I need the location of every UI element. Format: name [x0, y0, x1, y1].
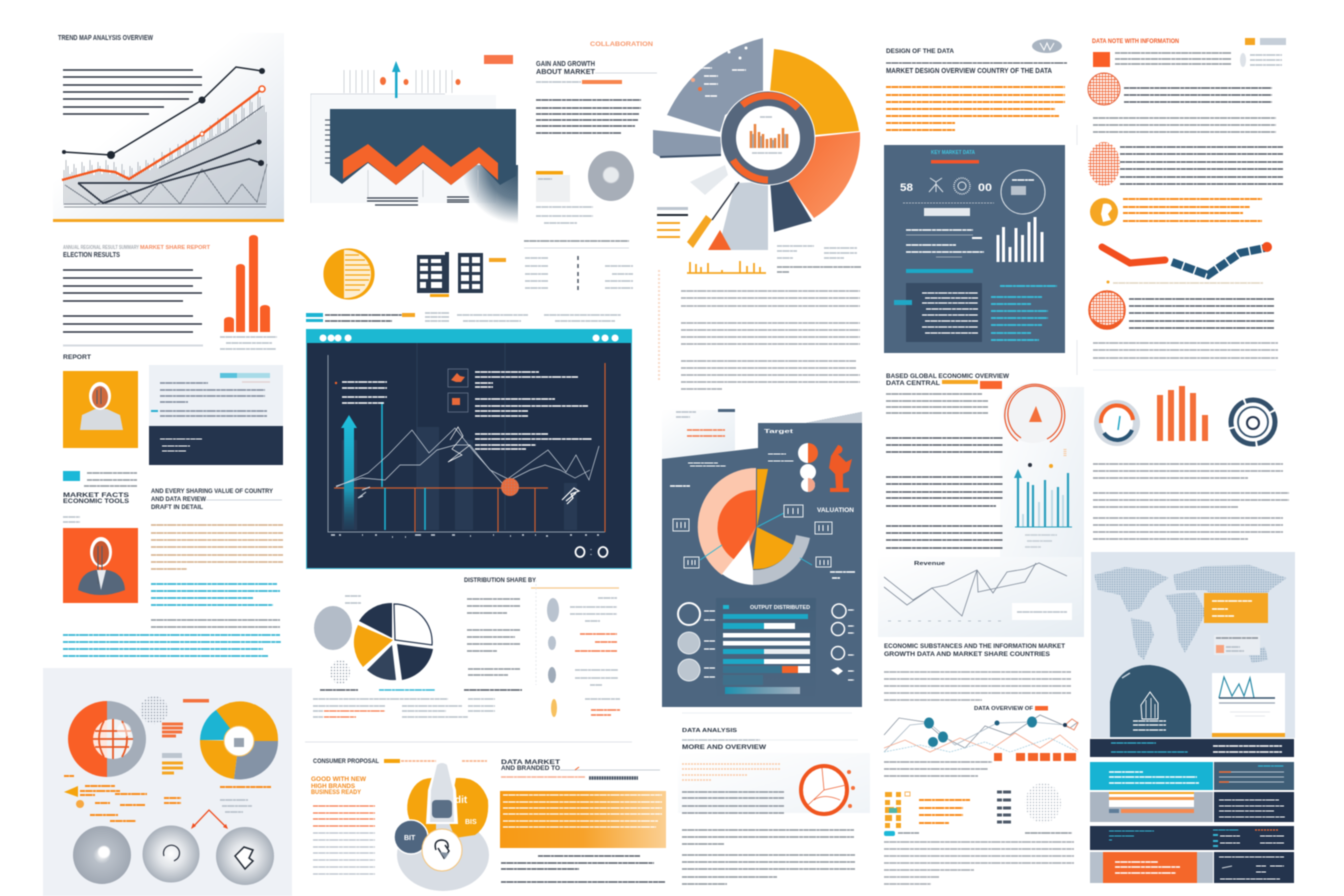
band four: [1090, 826, 1294, 850]
orange node: [501, 478, 519, 496]
text block: top center: [536, 42, 657, 223]
center ring: [721, 91, 815, 185]
white circle: [422, 829, 462, 871]
heading: ANNUAL REGIONAL RESULT SUMMARY: [63, 245, 139, 251]
dark area: [330, 109, 516, 185]
orange bars: [224, 235, 270, 332]
peach arc: [698, 468, 756, 575]
text block: orange callout: AND BRANDED TO: [501, 765, 560, 772]
orange paragraph: [886, 87, 1065, 130]
text block: lower middle column with red ring: MORE AND OVERVIEW: [682, 745, 766, 751]
panel: slate stats: 00: [978, 182, 992, 194]
slate shape: [662, 412, 862, 707]
red arrow: [193, 810, 226, 827]
white card: [1212, 673, 1285, 737]
grey sector: [667, 38, 763, 132]
band two: [1090, 762, 1213, 790]
text block: middle article footer: [884, 643, 1071, 712]
text column: portrait article: [63, 488, 283, 656]
axes: [328, 355, 605, 532]
white data lines: [336, 428, 599, 487]
concentric ring: [1231, 400, 1275, 444]
orange headline: GOOD WITH NEW: [311, 776, 367, 783]
icon: orange sphere: [324, 249, 374, 299]
red image two: [1088, 142, 1120, 186]
heading: chart title: TREND MAP ANALYSIS OVERVIEW: [58, 35, 153, 42]
yellow wedge: [753, 527, 793, 569]
header row above dark chart: [306, 313, 621, 322]
panel: right article with circle images: [1077, 38, 1286, 375]
panel: slate donut dashboard: [662, 409, 862, 707]
panel: text with orange bars: [63, 235, 277, 349]
text column: portrait article: AND DATA REVIEW: [151, 496, 207, 503]
zigzag: [343, 144, 498, 185]
white wedge: [722, 540, 753, 585]
panel: middle article with ring and bars: DATA CENTRAL: [886, 380, 940, 387]
tick lines: [344, 70, 452, 93]
panel: top-middle article: [886, 39, 1067, 130]
cyan key: [63, 471, 80, 481]
panel: bulb and overlapping circles: BIT: [404, 835, 416, 842]
caption: [501, 856, 665, 882]
orange mini chart: [687, 261, 766, 273]
notes: [777, 246, 857, 258]
scatter halo: [140, 696, 168, 724]
orange lobes: [407, 778, 488, 838]
text block: orange callout: [500, 759, 666, 882]
left text: [342, 382, 387, 403]
corner fade: [462, 165, 518, 227]
heading: KEY MARKET DATA: [931, 150, 975, 156]
grey ring: [397, 819, 489, 891]
panel: rings and orange bars: [1093, 386, 1289, 539]
orange bars: [1157, 395, 1163, 441]
dark trend lines: [78, 142, 261, 203]
chart: network lines: [884, 715, 1078, 776]
info box: [149, 365, 283, 426]
yellow strip: [757, 469, 768, 527]
panel: orange zigzag chart: [311, 55, 518, 227]
panel: text with orange bars: MARKET SHARE REPORT: [140, 245, 211, 251]
panel: top-middle article: MARKET DESIGN OVERVIEW COUNTRY OF THE DATA: [886, 68, 1052, 75]
lower lines: [367, 197, 469, 205]
orange image: [1090, 198, 1118, 226]
chain graphic: [1102, 247, 1165, 263]
callouts: VALUATION: [817, 508, 854, 514]
tan paragraph: [151, 525, 283, 569]
legend row: [320, 689, 522, 691]
continents: [1094, 567, 1169, 612]
grey globe: [314, 606, 352, 650]
grey arc: [753, 535, 810, 585]
small icons: [547, 598, 559, 622]
heading two: MARKET FACTS: [63, 492, 130, 499]
black trend line: [64, 67, 262, 155]
panel: portrait cards: ECONOMIC TOOLS: [63, 498, 130, 505]
orange label: [1204, 593, 1268, 623]
left circles: [678, 603, 700, 625]
wide cyan paragraph: [63, 635, 281, 656]
bird scribble: [562, 488, 579, 504]
panel: slate stats: [884, 145, 1065, 353]
light top block: [662, 410, 735, 460]
panel: portrait cards: [63, 345, 283, 603]
heading: DESIGN OF THE DATA: [886, 48, 954, 55]
band one: [1090, 739, 1294, 757]
bulb: [426, 761, 458, 824]
dark circle: [394, 820, 428, 854]
orange trend line: [62, 89, 262, 180]
panel: bulb and overlapping circles: HIGH BRANDS: [311, 783, 356, 790]
orange note: [536, 171, 563, 174]
note text: [467, 599, 520, 675]
band three: [1090, 792, 1213, 822]
paragraphs: [886, 394, 988, 413]
orange dots: [380, 77, 386, 85]
globe pie: [68, 701, 107, 777]
teal nodes: [924, 718, 934, 728]
panel: slate donut dashboard: OUTPUT DISTRIBUTED: [750, 605, 810, 611]
orange tag: [484, 55, 513, 64]
orange sector: [770, 49, 859, 135]
blue arrow: [341, 415, 357, 530]
table rows: [313, 699, 495, 717]
inner bars: [751, 124, 787, 148]
white bars: [998, 217, 1042, 262]
heading: GAIN AND GROWTH: [536, 61, 595, 68]
icon: dark block grids: [417, 252, 506, 297]
red ring: [801, 766, 847, 814]
bottom circles: [576, 547, 584, 557]
table: right of icons: [524, 241, 633, 290]
dark sector: [770, 180, 812, 232]
icons: [929, 178, 943, 192]
icon boxes: [448, 369, 468, 387]
text block: top center: COLLABORATION: [590, 42, 653, 48]
line chart: Revenue: [914, 561, 945, 567]
panel: dark line chart: [306, 329, 632, 568]
orange tag: DATA OVERVIEW OF: [974, 706, 1034, 712]
panel: pie with notes: [305, 577, 632, 742]
text block: middle article footer: GROWTH DATA AND MARKET SHARE COUNTRIES: [884, 651, 1051, 658]
cyan paragraph: [151, 584, 280, 605]
figures: [808, 443, 818, 463]
coral sector: [788, 132, 860, 218]
big numbers: 58: [900, 182, 913, 194]
panel: bulb and overlapping circles: [311, 759, 489, 891]
small card: [1214, 635, 1260, 655]
heading: DISTRIBUTION SHARE BY: [464, 577, 537, 584]
cyan text: [991, 286, 1057, 340]
red image one: [1088, 73, 1120, 105]
lines: [63, 270, 202, 332]
red image three: [1089, 291, 1125, 329]
stipple disc: [1025, 783, 1061, 823]
panel: rising line chart: [53, 33, 284, 222]
dark inner box: [906, 283, 982, 342]
panel: text with orange bars: ELECTION RESULTS: [63, 250, 120, 259]
dark box: [149, 426, 283, 465]
grey discs: [73, 826, 131, 884]
grey disc: [588, 151, 634, 201]
panel: bulb and overlapping circles: dit: [455, 795, 468, 806]
gauge ring: [1094, 400, 1140, 446]
list lines: [313, 806, 375, 826]
heading: DATA MARKET: [501, 759, 560, 766]
panel: orange icon list: [884, 783, 1074, 884]
orange box: [500, 791, 666, 848]
heading: REPORT: [63, 354, 91, 361]
paragraph: [536, 100, 641, 133]
logo stamp: [1032, 39, 1062, 53]
colour pie: [216, 701, 278, 741]
left bar: [653, 130, 721, 157]
orange inner: [717, 490, 756, 560]
right text: [475, 372, 592, 449]
paragraphs: [1093, 464, 1289, 539]
heading: Target: [764, 429, 793, 435]
text lines: [63, 70, 202, 114]
panel: bulb and overlapping circles: BIS: [465, 819, 477, 826]
pointer and triangle: [687, 215, 712, 248]
light sector: [718, 182, 768, 250]
red portrait: [63, 528, 138, 603]
cyan header bar: [306, 329, 632, 343]
paragraphs: [682, 792, 855, 884]
text block: lower middle column with red ring: DATA ANALYSIS: [682, 728, 737, 734]
panel: world map and bands: [1090, 552, 1295, 883]
right icons: [832, 604, 846, 618]
heading: CONSUMER PROPOSAL: [313, 759, 379, 765]
dark paragraph: [151, 620, 280, 627]
table panel: [716, 598, 816, 700]
heading: AND EVERY SHARING VALUE OF COUNTRY: [151, 488, 274, 495]
triangle: [1029, 406, 1042, 422]
orange portrait: [63, 371, 138, 448]
band five: [1090, 852, 1213, 883]
cyan bars: [1023, 490, 1063, 527]
heading: BASED GLOBAL ECONOMIC OVERVIEW: [886, 373, 1010, 380]
column bands: [342, 427, 577, 530]
left legend: [657, 207, 688, 210]
text block: lower middle column with red ring: [678, 713, 870, 884]
text column: portrait article: DRAFT IN DETAIL: [151, 504, 203, 511]
orange squares: [994, 753, 1076, 761]
panel: middle article with ring and bars: [878, 373, 1084, 637]
orange labels: [183, 699, 209, 702]
right labels: [570, 598, 620, 699]
heading: DATA NOTE WITH INFORMATION: [1092, 39, 1179, 45]
orange callouts: [64, 776, 271, 821]
text block: top center: ABOUT MARKET: [536, 69, 596, 76]
paragraphs: [681, 291, 860, 389]
spike area: [64, 93, 266, 205]
up arrow: [392, 61, 400, 98]
pie: [394, 604, 432, 645]
tick marks: [331, 535, 599, 537]
fade wedge: [690, 165, 728, 195]
horizontal bars: [723, 614, 808, 619]
chart: central radial sectors: [653, 38, 861, 389]
bar notes: [906, 230, 984, 252]
panel: bulb and overlapping circles: BUSINESS READY: [311, 789, 362, 796]
panel: bottom-left pie charts: [43, 668, 292, 896]
faint orange text: [682, 764, 780, 780]
red ring: [1003, 383, 1063, 443]
dark arch: [1110, 665, 1191, 737]
text block: middle article footer: ECONOMIC SUBSTANCES AND THE INFORMATION MARKET: [884, 643, 1065, 650]
